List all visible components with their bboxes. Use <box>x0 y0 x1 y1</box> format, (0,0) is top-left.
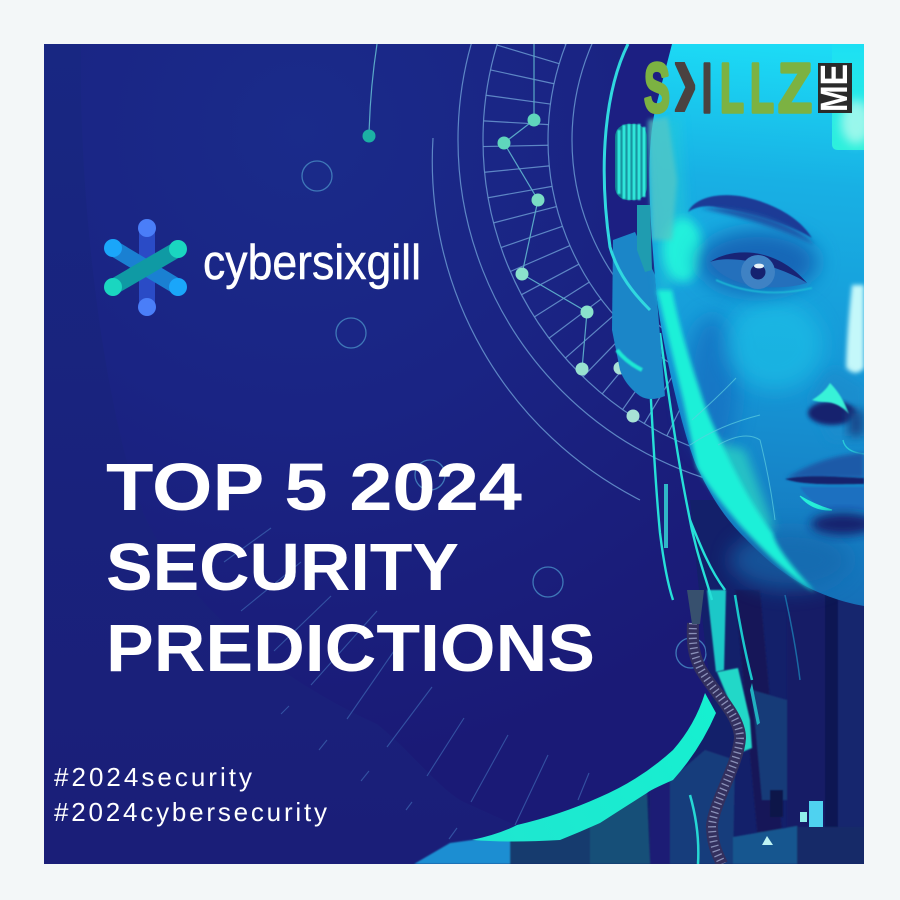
machinery plates, softened <box>414 590 864 864</box>
head and face <box>615 44 875 606</box>
title: PREDICTIONS <box>106 611 595 686</box>
logo icon: cybersixgill <box>104 219 187 316</box>
side plate <box>648 117 677 240</box>
network nodes <box>362 44 640 422</box>
title: TOP 5 2024 <box>106 450 522 525</box>
ear cup with stripes <box>615 124 647 200</box>
panel base colour <box>44 44 516 864</box>
logo: SkillzMe: ME <box>814 64 856 112</box>
title: SECURITY <box>106 530 459 605</box>
cyan indicators <box>809 801 823 827</box>
helmet ring <box>604 44 650 310</box>
logo: SkillzMe: › <box>671 6 699 149</box>
side clip <box>637 205 652 272</box>
hashtags: #2024security <box>54 762 252 792</box>
temple shading <box>646 124 686 289</box>
headband glow <box>841 100 871 144</box>
teal side strip <box>750 683 760 725</box>
ear highlight <box>617 350 642 370</box>
neck strands <box>690 595 800 864</box>
tech rings <box>432 44 702 500</box>
teal collar <box>472 693 716 842</box>
lower face shadow <box>730 530 850 590</box>
cheek highlight <box>727 300 823 390</box>
headband tile <box>832 44 864 150</box>
logo: SkillzMe: S <box>644 49 670 127</box>
robot body machinery <box>414 500 864 864</box>
eyebrow <box>688 195 812 238</box>
jaw teal band <box>657 290 815 592</box>
eyebrow shadow <box>700 208 815 245</box>
logo: SkillzMe: I <box>702 49 712 127</box>
teal neck blob <box>717 668 752 752</box>
strands beside cheek <box>650 332 726 600</box>
philtrum line <box>843 440 864 454</box>
eye <box>710 252 812 292</box>
logo: SkillzMe: L <box>720 49 744 127</box>
ear <box>612 232 665 399</box>
nose bridge highlight <box>846 285 864 373</box>
hashtags <box>54 762 327 827</box>
hashtags: #2024cybersecurity <box>54 797 327 827</box>
large background disc <box>238 100 362 245</box>
diagonal dashes <box>224 528 589 839</box>
logo: SkillzMe <box>644 6 856 149</box>
lower lip <box>800 487 864 510</box>
face seam lines <box>690 378 775 520</box>
title <box>106 450 595 686</box>
cheek shadow <box>686 315 738 455</box>
eye socket <box>698 230 818 294</box>
temple glow <box>663 218 703 282</box>
shadow under nose <box>848 410 864 436</box>
logo wordmark: cybersixgill <box>203 236 421 290</box>
jaw soft tint <box>710 440 775 530</box>
face shape <box>649 44 864 606</box>
lower lip teal crescent <box>800 496 832 510</box>
upper lip <box>786 453 864 478</box>
nostril shadow <box>808 401 856 425</box>
nose shadow <box>810 368 864 440</box>
braided cable <box>693 623 740 864</box>
logo: SkillzMe: L <box>750 49 774 127</box>
helmet dark backing <box>605 44 672 310</box>
teal neck mass <box>707 590 726 672</box>
nose highlight <box>812 383 849 414</box>
outlined circles <box>302 161 706 668</box>
chin shadow <box>811 513 875 535</box>
logo: SkillzMe: Z <box>778 49 812 127</box>
lip line <box>785 476 864 484</box>
